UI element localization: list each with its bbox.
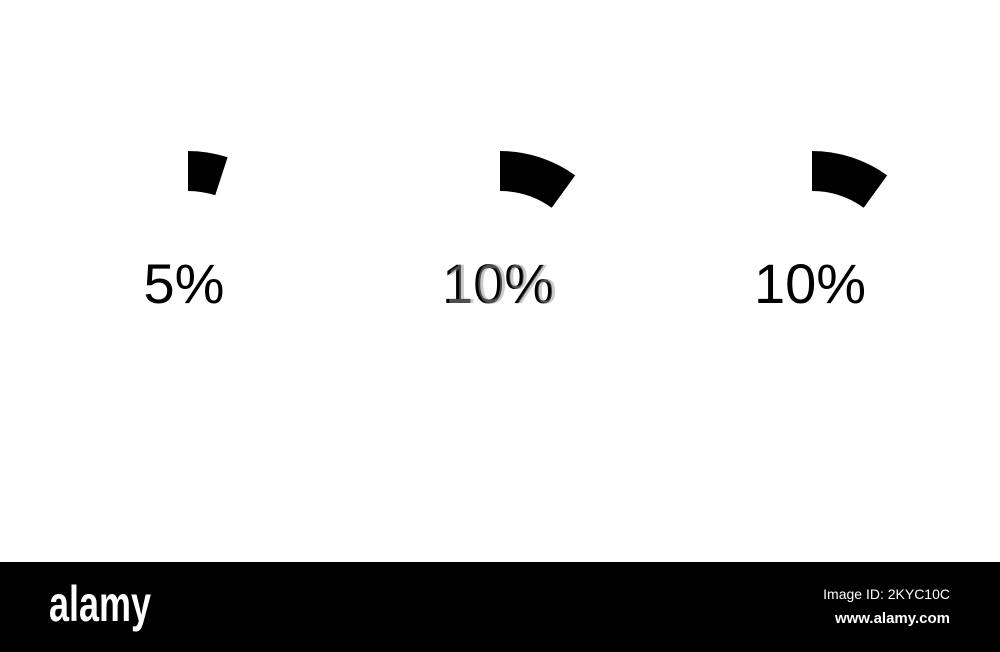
arc 5%	[188, 151, 228, 195]
arc 10% middle	[500, 151, 575, 208]
label 10% right: 10%	[754, 252, 866, 315]
image id text: Image ID: 2KYC10C	[823, 586, 950, 602]
arc 10% right	[812, 151, 887, 208]
gauge 1: 5%	[144, 151, 228, 315]
footer band	[0, 562, 1000, 652]
gauge 2: 10%	[442, 151, 575, 315]
gauge 3: 10%	[754, 151, 887, 315]
website text: www.alamy.com	[834, 610, 950, 627]
label 5%: 5%	[144, 252, 224, 315]
label 10% middle: 10%	[445, 252, 557, 315]
label 10% middle: 10%	[442, 252, 554, 315]
logo: alamy: alamy	[49, 576, 151, 632]
